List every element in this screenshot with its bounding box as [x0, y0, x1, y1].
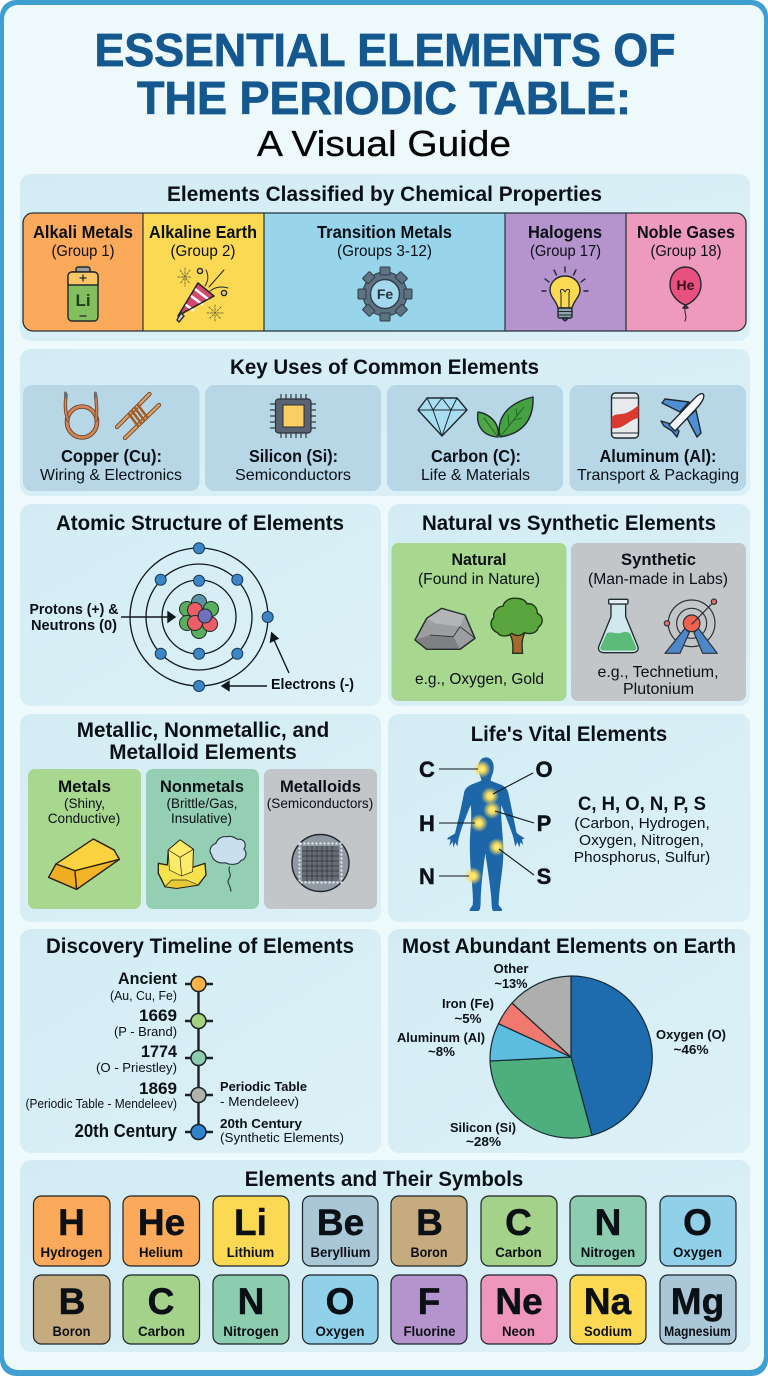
text: metalloids	[267, 777, 373, 811]
tile: carbon, second row: Carbon	[138, 1324, 185, 1339]
label: iron: ~5%	[454, 1011, 482, 1026]
card: carbon	[387, 385, 563, 491]
card: metalloids	[264, 769, 377, 909]
event: ancient: Ancient	[118, 969, 177, 988]
text: copper use	[40, 446, 182, 484]
tile: oxygen, second row	[302, 1275, 378, 1344]
glowing element points	[464, 760, 506, 885]
event: 1774: 1774	[141, 1042, 178, 1061]
card: copper	[23, 385, 200, 491]
text: metals: (Shiny,	[64, 795, 105, 811]
note: synthetic elements	[220, 1116, 344, 1145]
label: transition metals: (Groups 3-12)	[337, 243, 432, 260]
text: metals: Metals	[58, 777, 111, 796]
tile: neon: Neon	[502, 1324, 535, 1339]
icon: soda can	[612, 393, 638, 438]
text: copper use: Wiring & Electronics	[40, 467, 182, 484]
label: silicon: ~28%	[466, 1134, 501, 1149]
label: noble gases: (Group 18)	[650, 243, 722, 260]
text: synthetic label: Synthetic	[621, 550, 696, 569]
timeline axis and nodes	[185, 976, 213, 1140]
label: oxygen: ~46%	[674, 1042, 709, 1057]
tile: fluorine: F	[418, 1281, 440, 1322]
text: copper use: Copper (Cu):	[61, 446, 162, 466]
label: electrons: Electrons (-)	[271, 676, 354, 693]
tile: oxygen: O	[683, 1202, 712, 1243]
event: 1774: (O - Priestley)	[96, 1060, 177, 1075]
icon: flask	[598, 599, 638, 653]
icon: gear with Fe	[358, 267, 412, 321]
label: alkaline earth	[149, 222, 257, 260]
tile: carbon, second row: C	[148, 1281, 174, 1322]
panel: natural vs synthetic	[388, 504, 750, 706]
human body diagram	[419, 757, 553, 911]
tile: hydrogen: Hydrogen	[40, 1245, 102, 1260]
text: metals: Conductive)	[48, 810, 120, 826]
label: alkali metals	[33, 222, 133, 260]
label: other: Other	[494, 961, 528, 976]
tile: oxygen: Oxygen	[673, 1245, 722, 1260]
text: metalloids: Metalloids	[280, 777, 361, 796]
tile: fluorine	[391, 1275, 467, 1344]
icon: rock	[415, 608, 475, 649]
tile: carbon: C	[505, 1202, 532, 1243]
text: nonmetals: (Brittle/Gas,	[166, 795, 238, 811]
text: silicon use	[235, 446, 351, 484]
tile: beryllium: Beryllium	[310, 1245, 370, 1260]
tile: lithium	[213, 1196, 289, 1266]
title	[94, 24, 676, 164]
card: nonmetals	[146, 769, 259, 909]
label: oxygen: Oxygen (O)	[656, 1027, 726, 1042]
heading: most abundant: Most Abundant Elements on Earth	[402, 935, 736, 958]
label: alkaline earth: (Group 2)	[170, 243, 236, 260]
tile: sodium: Na	[584, 1281, 632, 1322]
event: 1669: 1669	[139, 1006, 177, 1025]
element letters: H	[419, 811, 435, 836]
body silhouette	[447, 757, 525, 911]
panel: discovery timeline	[20, 929, 381, 1153]
tile: magnesium: Mg	[671, 1281, 724, 1322]
icon: party popper	[177, 268, 228, 322]
tile: nitrogen, second row: N	[238, 1281, 264, 1322]
event: ancient	[110, 969, 177, 1003]
panel: atomic structure	[20, 504, 381, 706]
text: carbon use: Carbon (C):	[431, 446, 521, 466]
text: synthetic examples: e.g., Technetium,	[598, 664, 718, 681]
text: aluminum use	[577, 446, 739, 484]
panel: most abundant elements	[388, 929, 750, 1153]
tile: boron, second row: Boron	[52, 1324, 90, 1339]
element letters	[419, 757, 553, 889]
label: alkali metals: Alkali Metals	[33, 222, 133, 242]
icon: lithium battery	[68, 267, 98, 321]
text: element list: Oxygen, Nitrogen,	[579, 832, 704, 849]
label: aluminum	[397, 1030, 485, 1059]
panel: elements classified by chemical properties	[20, 174, 750, 341]
panel: elements and their symbols	[20, 1160, 750, 1352]
card: silicon	[205, 385, 381, 491]
label: silicon	[450, 1120, 516, 1149]
element letters: P	[537, 811, 551, 836]
icon: leaves	[478, 397, 533, 437]
event: ancient: (Au, Cu, Fe)	[110, 988, 177, 1003]
tile: neon	[481, 1275, 557, 1344]
label: other	[494, 961, 528, 991]
text: nonmetals: Insulative)	[171, 810, 232, 826]
heading: discovery timeline: Discovery Timeline of Elements	[46, 935, 354, 958]
electrons	[155, 543, 273, 692]
tile: oxygen, second row: Oxygen	[316, 1324, 364, 1339]
title: ESSENTIAL ELEMENTS OF	[94, 24, 676, 76]
tile: nitrogen, second row: Nitrogen	[223, 1324, 279, 1339]
text: silicon use: Semiconductors	[235, 467, 351, 484]
arrow: to nucleus	[121, 612, 175, 622]
icon: gas cloud	[210, 836, 246, 892]
tile: nitrogen, second row	[213, 1275, 289, 1344]
label: iron: Iron (Fe)	[442, 996, 494, 1011]
tile: boron	[391, 1196, 467, 1266]
tile: carbon	[481, 1196, 557, 1266]
card: synthetic	[571, 543, 746, 701]
heading: natural vs synthetic: Natural vs Synthetic Elements	[422, 512, 716, 535]
note: periodic table: Periodic Table	[220, 1079, 307, 1094]
text: synthetic examples	[598, 664, 718, 698]
heading: metallic types: Metalloid Elements	[109, 741, 297, 764]
tile: beryllium	[302, 1196, 378, 1266]
text: element list	[574, 794, 710, 866]
icon: particle accelerator target	[664, 599, 717, 653]
text: element list: C, H, O, N, P, S	[578, 794, 706, 815]
heading: metallic types: Metallic, Nonmetallic, and	[77, 719, 329, 742]
tile: magnesium: Magnesium	[664, 1324, 731, 1339]
tile: boron: B	[416, 1202, 443, 1243]
text: silicon use: Silicon (Si):	[249, 446, 338, 466]
tile: helium	[123, 1196, 200, 1266]
panel: metallic, nonmetallic, metalloid	[20, 714, 381, 922]
text: aluminum use: Transport & Packaging	[577, 467, 739, 484]
icon: airplane	[661, 394, 704, 437]
element letters: S	[537, 864, 551, 889]
heading: elements and symbols: Elements and Their Symbols	[245, 1168, 523, 1191]
title: A Visual Guide	[257, 123, 511, 164]
event: 1669	[114, 1006, 177, 1039]
panel: key uses of common elements	[20, 349, 750, 496]
tile: magnesium	[660, 1275, 736, 1344]
label: halogens	[528, 222, 602, 260]
text: aluminum use: Aluminum (Al):	[600, 446, 716, 466]
icon: sulfur crystal	[158, 840, 206, 888]
text: natural examples: e.g., Oxygen, Gold	[415, 671, 544, 688]
label: halogens: (Group 17)	[530, 243, 601, 260]
label: protons and neutrons	[30, 601, 119, 634]
icon: helium balloon	[670, 267, 701, 321]
heading: classification: Elements Classified by Chemical Properties	[167, 183, 602, 206]
label: transition metals	[317, 222, 452, 260]
label: oxygen	[656, 1027, 726, 1057]
text: carbon use	[421, 446, 530, 484]
icon: diamond	[418, 398, 467, 436]
label: protons and neutrons: Protons (+) &	[30, 601, 119, 618]
label: protons and neutrons: Neutrons (0)	[31, 617, 117, 634]
text: metalloids: (Semiconductors)	[267, 795, 373, 811]
heading: key uses: Key Uses of Common Elements	[230, 356, 539, 379]
icon: light bulb	[542, 267, 588, 320]
event: 20th century: 20th Century	[74, 1121, 177, 1141]
heading: life's vital elements: Life's Vital Elements	[471, 723, 667, 746]
tile: fluorine: Fluorine	[404, 1324, 456, 1339]
text: element list: (Carbon, Hydrogen,	[574, 815, 710, 832]
tile: nitrogen: Nitrogen	[581, 1245, 635, 1260]
tile: boron, second row	[34, 1275, 110, 1344]
card: natural	[392, 543, 566, 701]
text: natural label: Natural	[452, 550, 506, 569]
icon: gear with Fe: Fe	[377, 286, 393, 302]
icon: gold bar	[49, 839, 119, 889]
tile: neon: Ne	[495, 1281, 543, 1322]
tile: sodium: Sodium	[584, 1324, 632, 1339]
icon: silicon wafer	[292, 834, 349, 892]
text: synthetic label	[588, 550, 728, 588]
note: synthetic elements: (Synthetic Elements)	[220, 1130, 344, 1145]
heading: metallic types	[77, 719, 329, 764]
icon: helium balloon: He	[677, 277, 695, 293]
heading: atomic structure: Atomic Structure of Elements	[56, 512, 344, 535]
tile: oxygen, second row: O	[326, 1281, 354, 1322]
label: halogens: Halogens	[528, 222, 602, 242]
note: periodic table: - Mendeleev)	[220, 1094, 299, 1109]
text: element list: Phosphorus, Sulfur)	[574, 849, 710, 866]
text: natural label: (Found in Nature)	[418, 571, 540, 588]
arrow: to outer electron	[270, 633, 289, 673]
event: 1774	[96, 1042, 178, 1075]
label: noble gases	[637, 222, 735, 260]
card: metals	[28, 769, 141, 909]
label: alkali metals: (Group 1)	[52, 243, 114, 260]
arrow: to lower electron	[222, 682, 267, 690]
text: nonmetals	[160, 777, 244, 826]
label: aluminum: ~8%	[428, 1044, 455, 1059]
label: alkaline earth: Alkaline Earth	[149, 222, 257, 242]
leader lines	[439, 769, 534, 876]
group colour strip	[23, 213, 746, 331]
tile: nitrogen	[570, 1196, 646, 1266]
pie chart	[490, 976, 652, 1138]
element letters: C	[419, 757, 435, 782]
panel: life's vital elements	[388, 714, 750, 922]
text: carbon use: Life & Materials	[421, 467, 530, 484]
title: THE PERIODIC TABLE:	[137, 72, 631, 124]
event: 1869: 1869	[139, 1079, 177, 1098]
icon: copper coil	[117, 394, 159, 438]
tile: beryllium: Be	[317, 1202, 364, 1243]
icon: tree	[491, 598, 542, 653]
event: 1869: (Periodic Table - Mendeleev)	[26, 1096, 177, 1111]
icon: lithium battery: Li	[75, 291, 91, 310]
text: synthetic examples: Plutonium	[623, 681, 694, 698]
tile: lithium: Li	[234, 1202, 267, 1243]
atom diagram	[130, 543, 273, 692]
tile: sodium	[570, 1275, 646, 1344]
tile: boron, second row: B	[59, 1281, 85, 1322]
nucleus	[180, 594, 218, 638]
tile: oxygen	[660, 1196, 736, 1266]
event: 1869	[26, 1079, 177, 1111]
tile: carbon, second row	[123, 1275, 200, 1344]
text: metals	[48, 777, 120, 826]
label: iron	[442, 996, 494, 1026]
tile: nitrogen: N	[595, 1202, 621, 1243]
text: synthetic label: (Man-made in Labs)	[588, 571, 728, 588]
label: transition metals: Transition Metals	[317, 222, 452, 242]
note: periodic table	[220, 1079, 307, 1109]
text: natural label	[418, 550, 540, 588]
element letters: N	[419, 864, 435, 889]
element letters: O	[535, 757, 553, 782]
icon: microchip	[270, 394, 316, 438]
label: aluminum: Aluminum (Al)	[397, 1030, 485, 1045]
tile: hydrogen: H	[58, 1202, 85, 1243]
note: synthetic elements: 20th Century	[220, 1116, 303, 1131]
tile: helium: Helium	[139, 1245, 183, 1260]
event: 1669: (P - Brand)	[114, 1024, 177, 1039]
tile: boron: Boron	[410, 1245, 448, 1260]
tile: carbon: Carbon	[495, 1245, 542, 1260]
text: nonmetals: Nonmetals	[160, 777, 244, 796]
tile: helium: He	[138, 1202, 185, 1243]
label: other: ~13%	[494, 976, 528, 991]
icon: copper cable	[65, 393, 97, 438]
card: aluminum	[570, 385, 746, 491]
tile: hydrogen	[34, 1196, 110, 1266]
tile: lithium: Lithium	[227, 1245, 274, 1260]
label: noble gases: Noble Gases	[637, 222, 735, 242]
label: silicon: Silicon (Si)	[450, 1120, 516, 1135]
